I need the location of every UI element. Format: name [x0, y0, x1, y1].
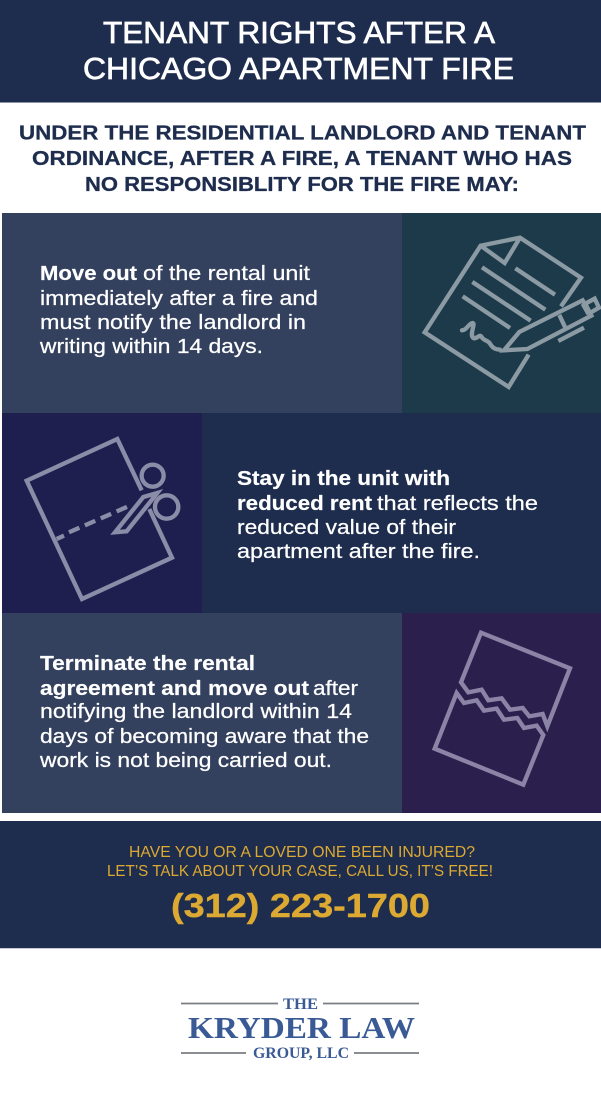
move out text: of the rental unit — [143, 262, 310, 285]
terminate text: after — [313, 677, 358, 700]
panel: move out — [2, 213, 601, 413]
terminate text: work is not being carried out. — [39, 749, 332, 772]
logo — [181, 996, 419, 1062]
logo: THE — [283, 996, 318, 1013]
terminate text: Terminate the rental — [40, 652, 255, 675]
reduced rent text: apartment after the fire. — [237, 540, 480, 563]
icon: document and pen — [425, 238, 599, 387]
title banner — [0, 0, 601, 103]
reduced rent text — [237, 467, 538, 563]
subheading — [19, 122, 587, 196]
terminate text — [39, 652, 369, 772]
phone number: (312) 223-1700 — [171, 887, 430, 924]
reduced rent text: Stay in the unit with — [237, 467, 450, 490]
move out text: immediately after a fire and — [40, 287, 318, 310]
icon: torn paper — [435, 633, 570, 785]
subheading: NO RESPONSIBLITY FOR THE FIRE MAY: — [85, 173, 519, 196]
call to action banner: LET’S TALK ABOUT YOUR CASE, CALL US, IT’S FREE! — [107, 863, 493, 880]
reduced rent text: reduced rent — [237, 492, 372, 515]
move out text: must notify the landlord in — [40, 311, 306, 334]
move out text — [39, 262, 318, 358]
icon: scissors cutting paper — [27, 439, 178, 599]
terminate text: agreement and move out — [40, 677, 309, 700]
panel: reduced rent — [2, 413, 601, 613]
call to action banner: HAVE YOU OR A LOVED ONE BEEN INJURED? — [129, 844, 475, 861]
subheading: UNDER THE RESIDENTIAL LANDLORD AND TENANT — [19, 122, 587, 144]
logo: GROUP, LLC — [253, 1045, 349, 1062]
terminate text: days of becoming aware that the — [40, 725, 369, 748]
title banner: TENANT RIGHTS AFTER A — [103, 15, 495, 50]
reduced rent text: that reflects the — [377, 492, 538, 515]
call to action banner — [0, 821, 601, 949]
subheading: ORDINANCE, AFTER A FIRE, A TENANT WHO HAS — [32, 147, 572, 170]
logo: KRYDER LAW — [188, 1010, 415, 1045]
terminate text: notifying the landlord within 14 — [40, 700, 352, 723]
move out text: Move out — [40, 262, 137, 285]
move out text: writing within 14 days. — [39, 335, 263, 358]
reduced rent text: reduced value of their — [237, 516, 456, 539]
panel: terminate — [2, 613, 601, 813]
title banner: CHICAGO APARTMENT FIRE — [83, 51, 514, 86]
